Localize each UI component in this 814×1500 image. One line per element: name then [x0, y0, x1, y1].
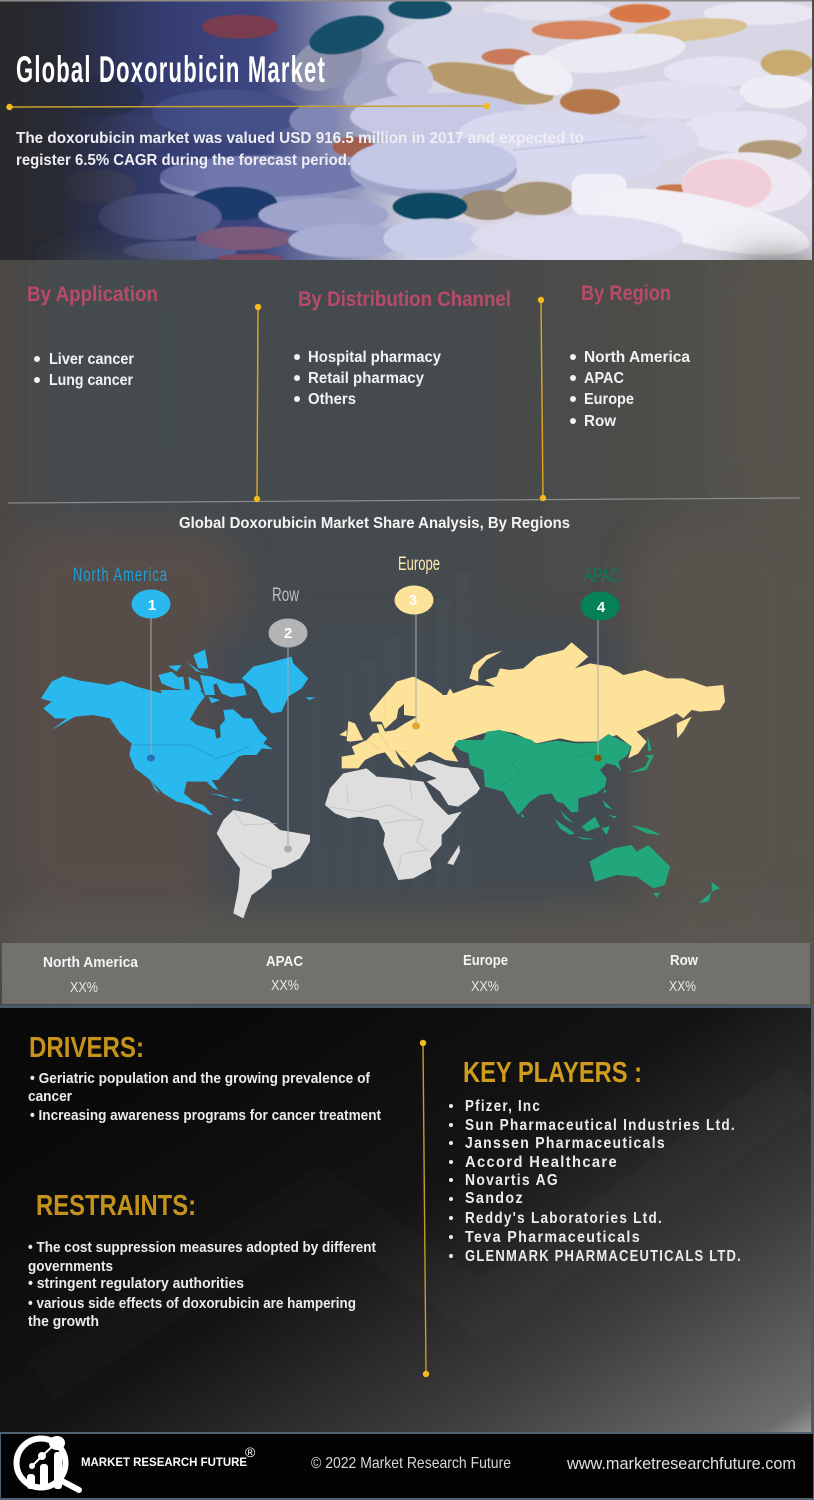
panel: by application — [27, 283, 158, 389]
pin 4: apac — [580, 566, 620, 762]
map region: apac — [454, 730, 720, 903]
panel: by region — [570, 282, 690, 430]
brand name: ® — [245, 1444, 256, 1460]
market summary text — [16, 130, 584, 169]
drivers list: • Increasing awareness programs for cancer treatment — [30, 1107, 381, 1124]
panel: drivers, restraints and key players background — [0, 1005, 814, 1432]
panel: by distribution channel: Hospital pharmacy — [308, 349, 441, 366]
pin 3: europe: 3 — [409, 592, 417, 609]
icon: market research future logo — [16, 1436, 79, 1490]
pin 1: north america — [73, 565, 170, 762]
restraints list: the growth — [28, 1313, 99, 1330]
column divider with gold dots — [420, 1040, 429, 1377]
key players list: Accord Healthcare — [465, 1154, 618, 1171]
regional share table — [2, 943, 810, 1004]
heading: restraints: RESTRAINTS: — [36, 1190, 196, 1222]
panel: by distribution channel: Retail pharmacy — [308, 370, 424, 387]
pin 2: row: Row — [272, 585, 299, 606]
panel: by region: By Region — [581, 282, 671, 305]
brand name: MARKET RESEARCH FUTURE — [81, 1455, 247, 1469]
heading: key players: KEY PLAYERS : — [463, 1057, 642, 1089]
drivers list — [28, 1070, 381, 1124]
drivers list: • Geriatric population and the growing prevalence of — [30, 1070, 371, 1087]
pin 1: north america: 1 — [148, 597, 156, 614]
key players list: Novartis AG — [465, 1172, 559, 1189]
panel: by distribution channel: By Distribution Channel — [298, 288, 511, 311]
panel: by region: Europe — [584, 391, 634, 408]
market summary text: The doxorubicin market was valued USD 916.5 million in 2017 and expected to — [16, 130, 584, 147]
restraints list: • The cost suppression measures adopted by different — [28, 1239, 376, 1256]
title: Global Doxorubicin Market — [16, 49, 326, 90]
pin 2: row: 2 — [284, 625, 292, 642]
title divider with end dots — [6, 103, 490, 110]
map region: rest of world — [217, 760, 480, 918]
regional share table: XX% — [471, 978, 499, 995]
brand name — [81, 1444, 256, 1469]
regional share table: Europe — [463, 952, 508, 969]
regional share table: XX% — [70, 979, 98, 996]
panel: by distribution channel — [294, 288, 511, 408]
market summary text: register 6.5% CAGR during the forecast period. — [16, 152, 351, 169]
panel: footer bar — [0, 1432, 814, 1500]
heading: drivers: DRIVERS: — [29, 1032, 144, 1064]
panel: by application: Liver cancer — [49, 351, 134, 368]
map region: europe and russia — [339, 642, 725, 768]
key players list: Sun Pharmaceutical Industries Ltd. — [465, 1117, 736, 1134]
regional share table: XX% — [669, 978, 696, 995]
world map — [41, 642, 725, 918]
panel: by distribution channel: Others — [308, 391, 356, 408]
pin 3: europe — [394, 554, 440, 730]
panel: segmentation and map background — [0, 260, 814, 1007]
key players list: Teva Pharmaceuticals — [465, 1229, 641, 1246]
panel: by region: Row — [584, 413, 617, 430]
key players list: GLENMARK PHARMACEUTICALS LTD. — [465, 1248, 742, 1265]
restraints list — [28, 1239, 376, 1330]
regional share table: Row — [670, 952, 698, 969]
regional share table: XX% — [271, 977, 299, 994]
panel: hero header with pills photo — [0, 0, 814, 269]
panel: by region: APAC — [584, 370, 624, 387]
restraints list: • various side effects of doxorubicin are hampering — [28, 1295, 356, 1312]
pin 4: apac: 4 — [597, 599, 606, 616]
key players list: Pfizer, Inc — [465, 1098, 541, 1115]
website url: www.marketresearchfuture.com — [566, 1454, 796, 1473]
section dividers with gold dots — [8, 297, 800, 503]
restraints list: • stringent regulatory authorities — [28, 1275, 244, 1292]
pin 4: apac: APAC — [584, 566, 620, 587]
restraints list: governments — [28, 1258, 113, 1275]
pin 1: north america: North America — [73, 565, 168, 586]
copyright: © 2022 Market Research Future — [311, 1455, 511, 1472]
panel: by region: North America — [584, 349, 690, 366]
key players list: Sandoz — [465, 1190, 524, 1207]
panel: by application: By Application — [27, 283, 158, 306]
map region: north america — [41, 649, 315, 815]
key players list — [449, 1098, 742, 1265]
key players list: Reddy's Laboratories Ltd. — [465, 1210, 663, 1227]
drivers list: cancer — [28, 1088, 72, 1105]
key players list: Janssen Pharmaceuticals — [465, 1135, 666, 1152]
map heading: Global Doxorubicin Market Share Analysis, By Regions — [179, 515, 570, 532]
pin 3: europe: Europe — [398, 554, 440, 575]
regional share table: APAC — [266, 953, 303, 970]
regional share table: North America — [43, 954, 139, 971]
pin 2: row — [268, 585, 308, 852]
panel: by application: Lung cancer — [49, 372, 133, 389]
